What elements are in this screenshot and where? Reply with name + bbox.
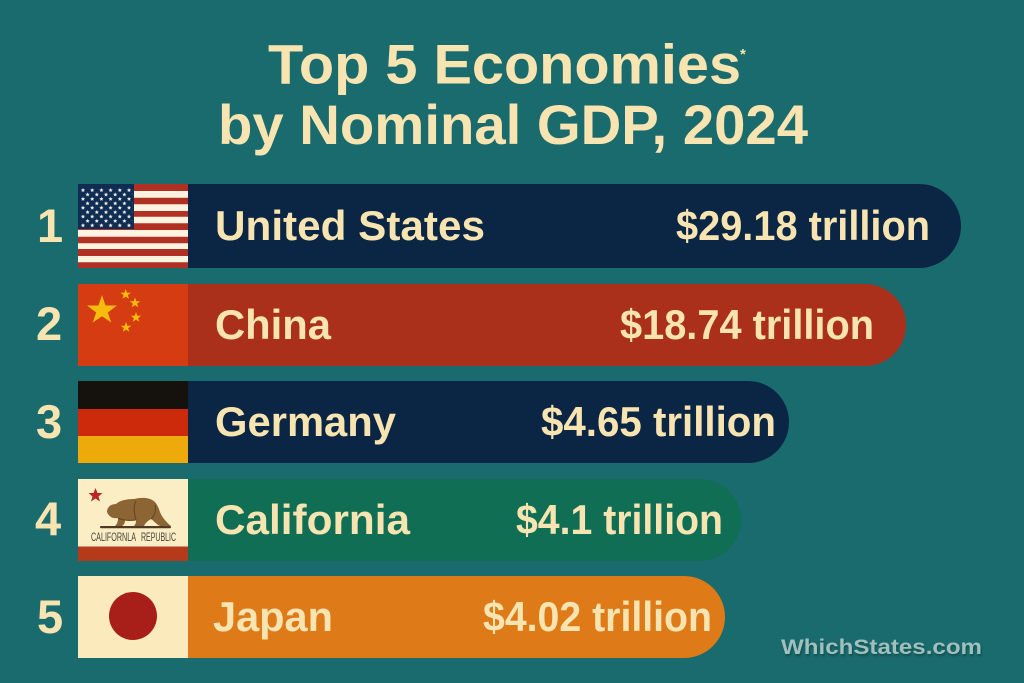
value: California: $4.1 trillion bbox=[516, 496, 723, 543]
row 5: Japan bbox=[37, 576, 725, 658]
row 1: United States bbox=[37, 184, 961, 268]
flag: Japan bbox=[78, 576, 188, 658]
title bbox=[218, 32, 808, 156]
rank 4: 4 bbox=[35, 492, 61, 545]
value: United States: $29.18 trillion bbox=[676, 202, 930, 249]
title: Top 5 Economies bbox=[268, 32, 741, 96]
flag text: CALIFORNLA bbox=[91, 532, 136, 544]
bar: California bbox=[78, 479, 741, 561]
label: China: China bbox=[215, 301, 332, 348]
label: United States: United States bbox=[215, 202, 485, 249]
icon: bear bbox=[100, 498, 171, 528]
row 3: Germany bbox=[36, 381, 789, 463]
watermark: WhichStates.com bbox=[781, 636, 982, 659]
row 2: China bbox=[36, 284, 906, 366]
bar: Japan bbox=[78, 576, 725, 658]
title: by Nominal GDP, 2024 bbox=[218, 93, 808, 156]
flag: Germany bbox=[78, 381, 188, 463]
bar: China bbox=[78, 284, 906, 366]
rank 2: 2 bbox=[36, 297, 62, 350]
flag text: REPUBLIC bbox=[141, 532, 176, 544]
value: Germany: $4.65 trillion bbox=[541, 398, 776, 445]
label: Germany: Germany bbox=[215, 398, 396, 445]
title: * bbox=[740, 46, 746, 63]
label: Japan: Japan bbox=[213, 593, 333, 640]
rank 5: 5 bbox=[37, 590, 63, 643]
rank 3: 3 bbox=[36, 395, 62, 448]
value: Japan: $4.02 trillion bbox=[483, 593, 712, 640]
bar: United States bbox=[78, 184, 961, 268]
flag: United States bbox=[78, 184, 188, 268]
value: China: $18.74 trillion bbox=[620, 301, 874, 348]
flag: California bbox=[78, 479, 188, 561]
row 4: California bbox=[35, 479, 741, 561]
label: California: California bbox=[215, 496, 411, 543]
flag: China bbox=[78, 284, 188, 366]
bar: Germany bbox=[78, 381, 789, 463]
rank 1: 1 bbox=[37, 199, 63, 252]
